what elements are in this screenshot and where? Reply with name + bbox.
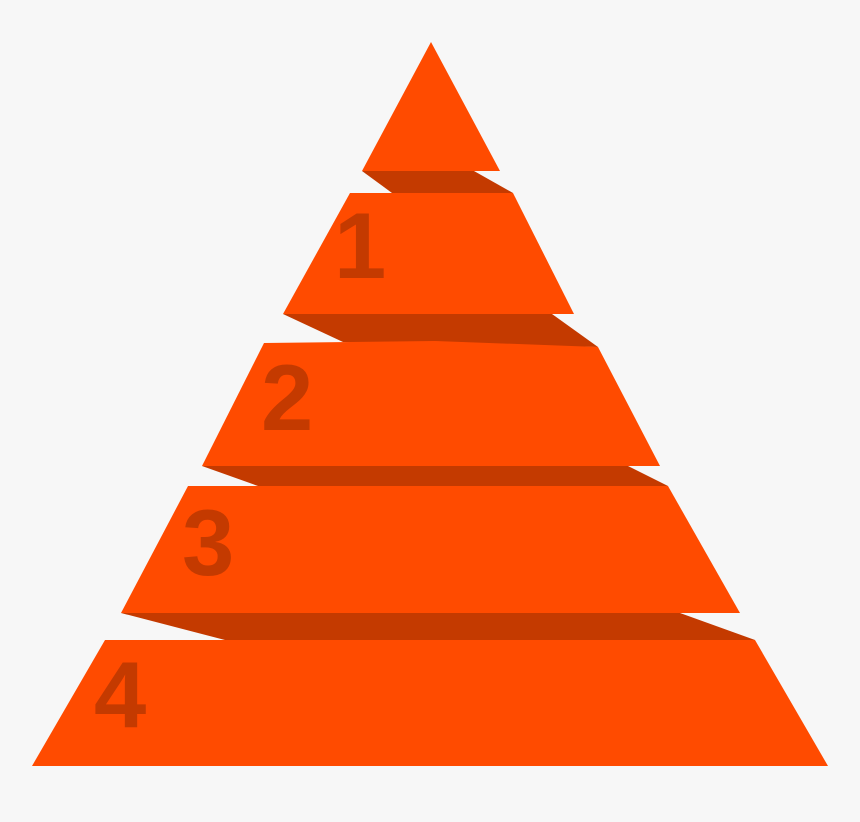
pyramid top	[362, 42, 500, 171]
shadow: under band 2	[202, 466, 668, 486]
band 1	[283, 193, 574, 314]
number 1: 1	[334, 193, 386, 298]
shadow: under band 1	[283, 314, 598, 347]
shadow: under top	[362, 171, 513, 193]
number 4: 4	[94, 642, 146, 747]
band 2	[202, 341, 660, 466]
band 3	[121, 486, 740, 613]
number 2: 2	[261, 345, 313, 450]
band 4	[32, 640, 828, 766]
shadow: under band 3	[121, 613, 755, 640]
number 3: 3	[182, 490, 234, 595]
